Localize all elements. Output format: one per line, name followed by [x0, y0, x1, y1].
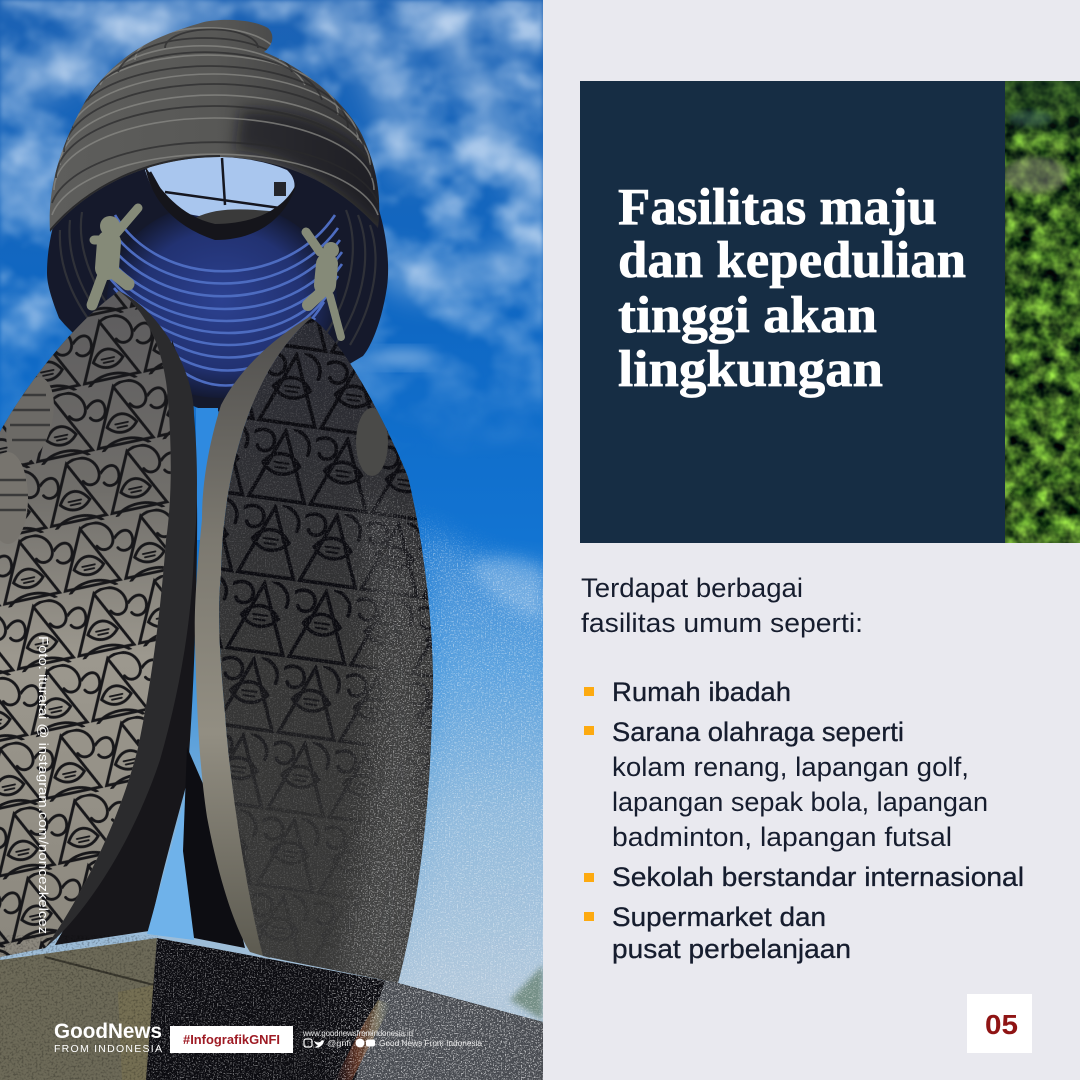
- photo: Kalimantan monument fountain under blue sky: [0, 0, 560, 1080]
- item: Sarana olahraga: badminton, lapangan futsal: [612, 822, 952, 852]
- black supports behind discs: [55, 340, 245, 948]
- title: Fasilitas maju: [618, 179, 937, 236]
- facilities list: [584, 677, 1024, 964]
- website and social handles: Good News From Indonesia: [379, 1038, 482, 1048]
- intro text: Terdapat berbagai: [581, 573, 803, 603]
- item: Sekolah berstandar internasional: Sekolah berstandar internasional: [612, 862, 1024, 892]
- title panel: [580, 81, 1005, 543]
- item: Supermarket: Supermarket dan: [612, 902, 826, 932]
- photo credit: Foto: iturarai @ instagram.com/noncezkelcez: [36, 636, 50, 934]
- item: Supermarket: [584, 902, 851, 964]
- intro text: fasilitas umum seperti:: [581, 608, 863, 638]
- hashtag badge: [170, 1026, 293, 1053]
- item: Supermarket: pusat perbelanjaan: [612, 934, 851, 964]
- item: Sarana olahraga: kolam renang, lapangan golf,: [612, 752, 969, 782]
- page number: 05: [985, 1009, 1018, 1040]
- left figure: [92, 208, 138, 305]
- item: Sarana olahraga: [584, 717, 988, 852]
- title: lingkungan: [618, 341, 883, 398]
- title: [618, 179, 966, 398]
- item: Sarana olahraga: lapangan sepak bola, lapangan: [612, 787, 988, 817]
- intro text: [581, 573, 863, 638]
- item: Rumah ibadah: Rumah ibadah: [612, 677, 791, 707]
- right figure: [306, 232, 341, 337]
- urn opening showing sky: [145, 157, 298, 240]
- logo: GoodNews From Indonesia: FROM INDONESIA: [54, 1043, 162, 1055]
- website and social handles: [302, 1028, 482, 1048]
- footer branding: [54, 1020, 482, 1055]
- title: dan kepedulian: [618, 232, 966, 289]
- stone base: [0, 935, 546, 1080]
- logo: GoodNews From Indonesia: GoodNews: [54, 1020, 162, 1043]
- spray droplets: [319, 486, 543, 1080]
- website and social handles: www.goodnewsfromindonesia.id: [302, 1028, 413, 1038]
- sky with clouds: [0, 0, 543, 1080]
- logo: GoodNews From Indonesia: [54, 1020, 162, 1055]
- left carved disc: [0, 280, 200, 960]
- website and social handles: @gnfi: [327, 1038, 351, 1048]
- item: Sarana olahraga: Sarana olahraga seperti: [612, 717, 904, 747]
- forest photo strip: [1004, 81, 1080, 543]
- page number: [967, 994, 1032, 1053]
- right carved disc: [190, 300, 440, 990]
- urn interior: [47, 150, 388, 412]
- hashtag badge: #InfografikGNFI: [183, 1033, 280, 1047]
- urn dome with coiled ribs: [50, 20, 385, 235]
- climbing figures: [92, 208, 341, 337]
- water spray haze: [414, 525, 543, 994]
- title: tinggi akan: [618, 287, 877, 344]
